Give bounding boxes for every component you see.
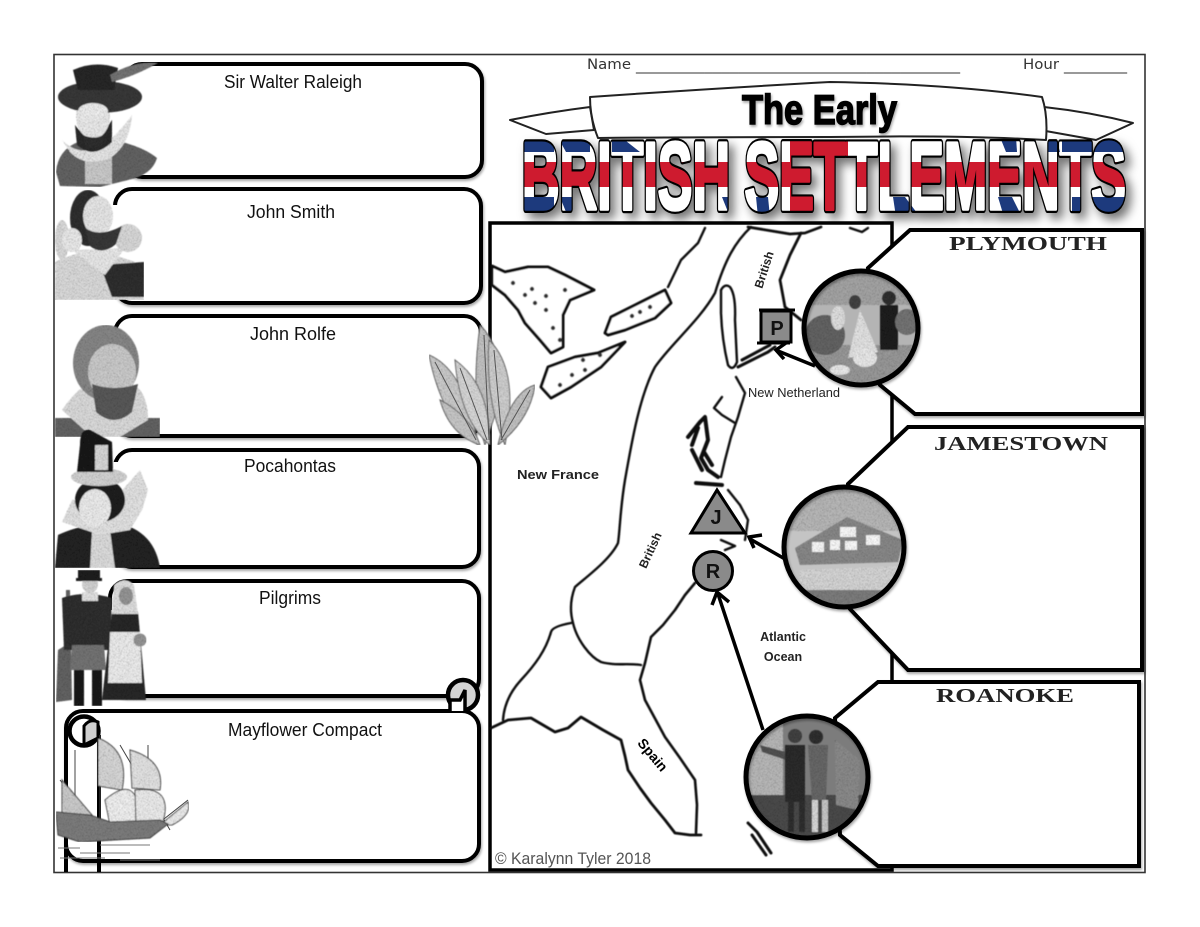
symbol: J triangle bbox=[691, 490, 745, 533]
panel: Mayflower Compact bbox=[66, 711, 479, 872]
arrow: Roanoke to R bbox=[712, 592, 763, 730]
picture: Jamestown fort bbox=[784, 486, 906, 610]
symbol: P scroll: P bbox=[770, 318, 784, 340]
picture: Roanoke colonists bbox=[745, 715, 870, 840]
map panel bbox=[490, 223, 892, 870]
scroll curl: upper left bbox=[70, 716, 98, 746]
name and hour lines: ______________________________________ bbox=[635, 58, 961, 74]
portrait: Pilgrims bbox=[56, 570, 148, 706]
name and hour lines: Hour bbox=[1023, 57, 1059, 73]
name and hour lines: Name bbox=[587, 57, 631, 73]
title banner bbox=[510, 82, 1133, 140]
scroll curl: lower right bbox=[448, 680, 478, 711]
panel: Pocahontas: Pocahontas bbox=[244, 456, 336, 476]
picture: Plymouth scene bbox=[800, 270, 924, 390]
panel: John Smith bbox=[115, 189, 481, 303]
panel: John Rolfe: John Rolfe bbox=[250, 324, 336, 344]
panel: Roanoke: ROANOKE bbox=[936, 685, 1074, 707]
symbol: R circle bbox=[694, 552, 732, 590]
left panels bbox=[66, 64, 482, 872]
symbol: P scroll bbox=[757, 310, 795, 343]
arrow: Plymouth to P bbox=[776, 343, 815, 366]
panel: Jamestown bbox=[848, 427, 1142, 670]
panel: Plymouth bbox=[868, 230, 1142, 414]
panel: Pilgrims bbox=[110, 581, 479, 696]
portrait: Pocahontas bbox=[55, 430, 160, 568]
illustration: Mayflower ship bbox=[56, 735, 189, 860]
map labels bbox=[517, 250, 840, 775]
map labels: Ocean bbox=[764, 650, 802, 664]
map labels: Atlantic bbox=[760, 630, 806, 644]
panel: Sir Walter Raleigh bbox=[125, 64, 482, 177]
panel: Mayflower Compact: Mayflower Compact bbox=[228, 720, 382, 740]
map labels: New Netherland bbox=[748, 386, 840, 400]
icon: tobacco leaves bbox=[429, 325, 535, 445]
name and hour lines: _______ bbox=[1063, 58, 1128, 74]
panel: Sir Walter Raleigh: Sir Walter Raleigh bbox=[224, 72, 362, 92]
portrait: Sir Walter Raleigh bbox=[56, 62, 160, 187]
panel: John Rolfe bbox=[115, 316, 481, 436]
map labels: British bbox=[636, 530, 665, 570]
title: The Early: The Early bbox=[742, 86, 898, 133]
copyright: © Karalynn Tyler 2018 bbox=[495, 850, 651, 868]
map: great lakes bbox=[492, 266, 671, 398]
name and hour lines bbox=[587, 57, 1128, 74]
panel: Roanoke bbox=[835, 682, 1139, 866]
map labels: British bbox=[752, 250, 777, 290]
panel: John Smith: John Smith bbox=[247, 202, 335, 222]
portrait: John Smith bbox=[55, 190, 146, 300]
map labels: Spain bbox=[634, 735, 671, 775]
panel: Jamestown: JAMESTOWN bbox=[934, 433, 1109, 455]
arrow: Jamestown to J bbox=[749, 535, 785, 559]
map labels: New France bbox=[517, 468, 599, 482]
right panels bbox=[835, 230, 1142, 866]
panel: Pilgrims: Pilgrims bbox=[259, 588, 321, 608]
symbol: R circle: R bbox=[706, 561, 721, 583]
panel: Plymouth: PLYMOUTH bbox=[949, 233, 1108, 255]
portrait: John Rolfe bbox=[55, 325, 160, 437]
symbol: J triangle: J bbox=[710, 507, 722, 529]
map: coastlines and boundaries bbox=[491, 227, 868, 855]
panel: Pocahontas bbox=[115, 450, 479, 567]
